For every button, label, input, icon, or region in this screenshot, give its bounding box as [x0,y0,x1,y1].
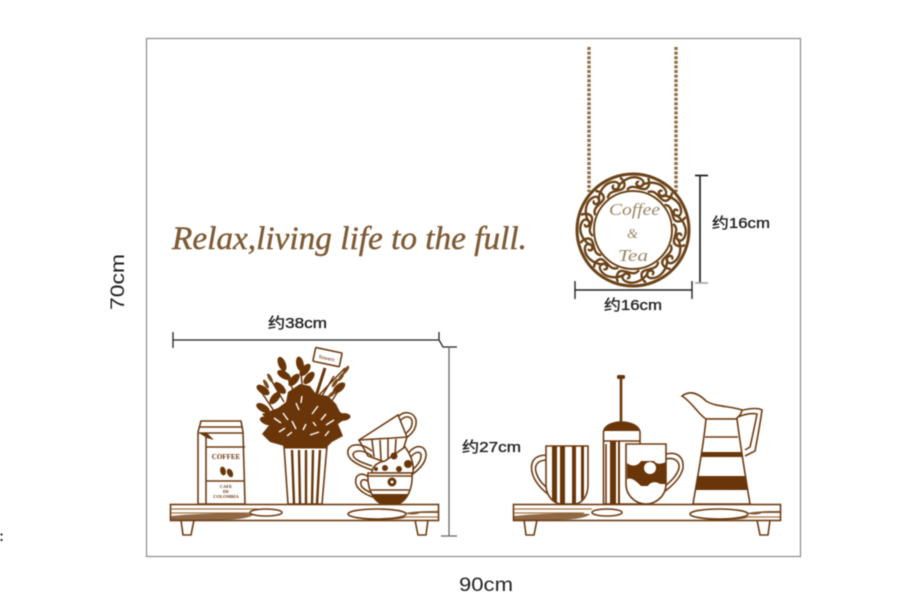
sign lettering: Coffee [609,200,661,219]
coffee bag [198,421,245,504]
sign width dimension: 约16cm [604,297,662,314]
striped mug [532,446,588,504]
ornamental ring [577,174,689,286]
sign lettering [609,200,661,265]
coffee bag: CAFE [220,484,232,489]
sign lettering: Tea [618,246,648,265]
left group width dimension: 约38cm [268,315,327,332]
striped vase [284,446,327,504]
middle cup [348,445,426,476]
plant tag: flowers [318,354,335,364]
overall height label: 70cm [108,254,129,310]
hanging sign [577,47,689,286]
top cup [359,413,416,462]
coffee bag: COFFEE [212,453,241,461]
striped jug [682,393,762,504]
foliage [255,356,351,446]
overall width label: 90cm [459,575,513,596]
left shelf [170,504,438,535]
sign height dimension: 约16cm [712,215,770,232]
sign width dimension [575,281,692,314]
coffee bag: COLOMBIA [213,494,239,499]
french press [603,375,640,504]
coffee bag: DE [223,489,229,494]
outer frame [146,38,800,556]
stacked teacups [348,413,426,504]
sign chains [589,47,676,192]
left group width dimension [173,315,457,348]
potted plant [255,347,351,504]
polka dot cup [626,444,683,504]
right shelf [514,504,780,535]
bottom cup [356,473,412,504]
slogan text: Relax,living life to the full. [171,221,527,257]
sign lettering: & [627,227,638,242]
plant tag [313,347,342,396]
sign height dimension [695,175,770,283]
left group height dimension: 约27cm [462,439,521,456]
left group height dimension [441,347,521,536]
